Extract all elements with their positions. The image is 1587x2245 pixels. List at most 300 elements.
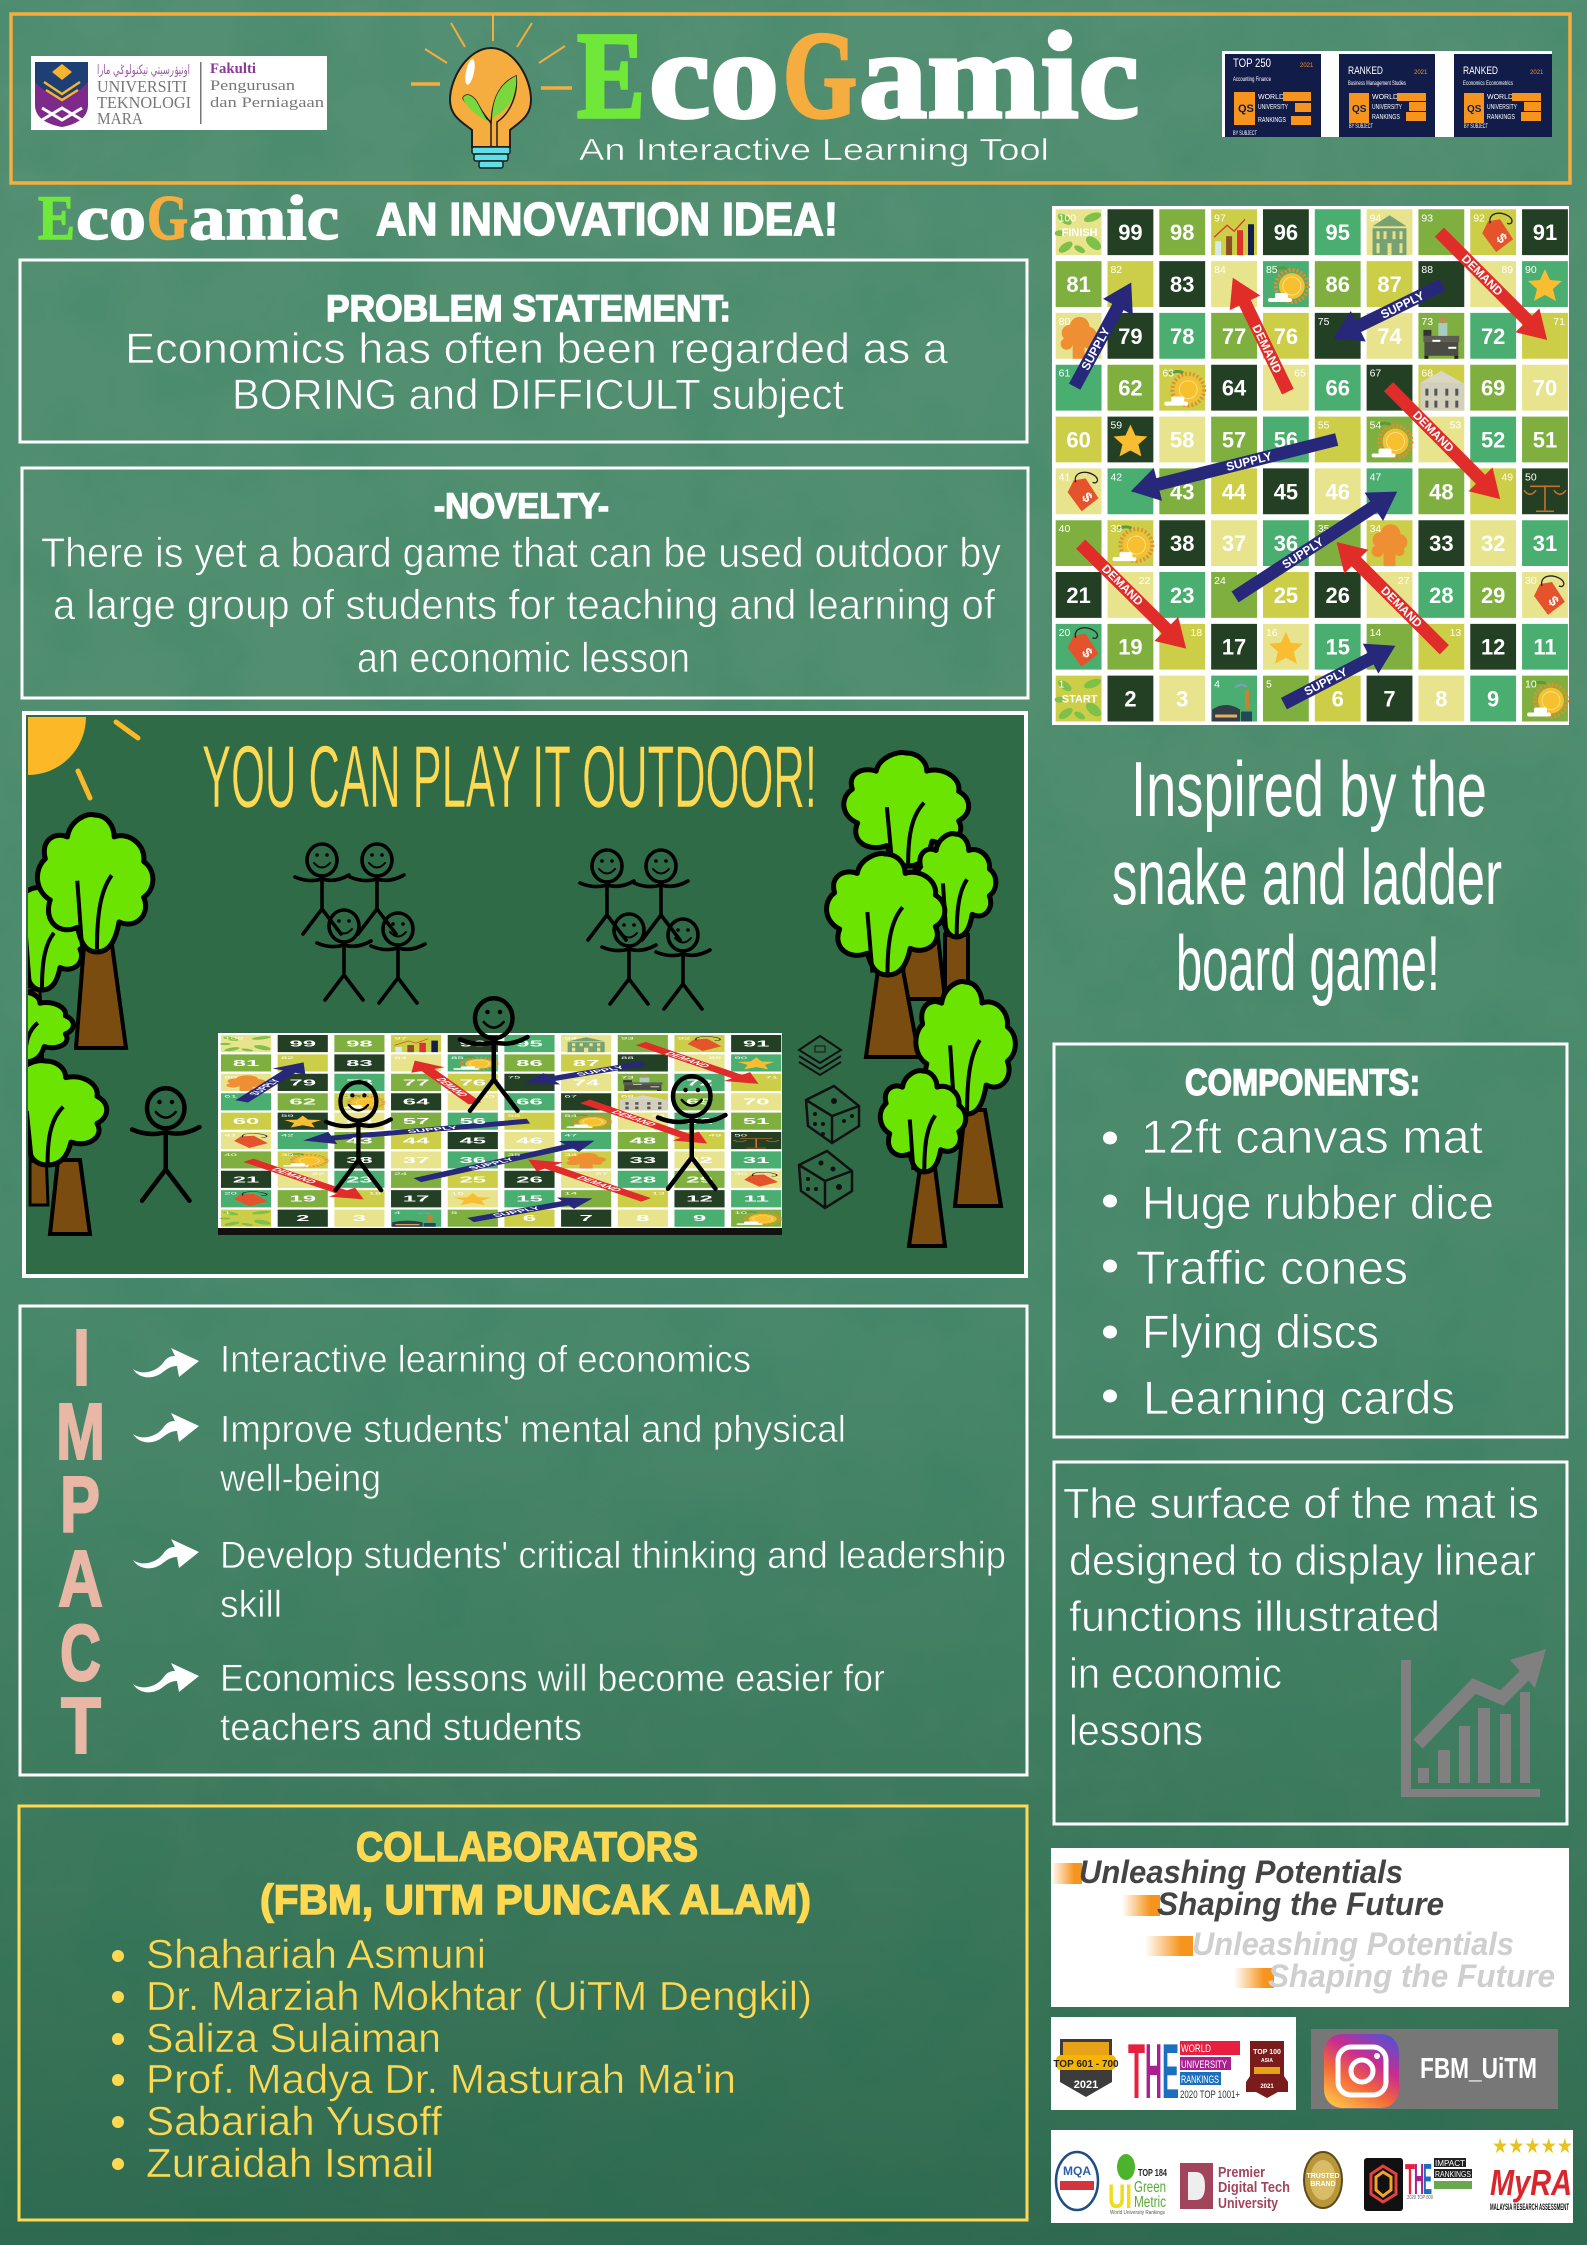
game mat: 28 xyxy=(630,1175,656,1184)
logo: UiTM faculty: TEKNOLOGI xyxy=(97,93,191,112)
game mat: 84 xyxy=(394,1055,407,1060)
slogan text xyxy=(1079,1854,1555,1994)
supply and demand arrows: DEMAND xyxy=(1378,583,1425,631)
slogan text: Unleashing Potentials xyxy=(1192,1926,1514,1962)
game mat: 6 xyxy=(523,1214,536,1223)
game mat: 41 xyxy=(224,1133,237,1137)
board numbers: small left: 24 xyxy=(1214,576,1226,587)
icon: die one xyxy=(806,1086,859,1143)
game mat: 82 xyxy=(281,1055,294,1060)
slogan panel xyxy=(1051,1848,1569,2007)
UI GreenMetric logo: UI xyxy=(1108,2178,1132,2216)
title: EcoGamic: E xyxy=(577,7,645,144)
board numbers: large: 28 xyxy=(1429,583,1454,608)
supply and demand arrows xyxy=(1060,220,1559,719)
trees: right group xyxy=(827,753,1015,1246)
impact item: easier lessons: teachers and students xyxy=(220,1707,582,1749)
panel: game board xyxy=(1052,206,1569,725)
vertical word IMPACT: T xyxy=(61,1681,101,1770)
game mat: SUPPLY xyxy=(466,1157,518,1171)
game mat: 91 xyxy=(743,1039,770,1048)
badge: accounting and finance: UNIVERSITY xyxy=(1258,104,1288,111)
board numbers: large: 21 xyxy=(1066,583,1091,608)
board numbers: large: 64 xyxy=(1222,376,1247,401)
icon: instagram xyxy=(1324,2034,1399,2108)
components list: Traffic cones xyxy=(1136,1241,1408,1294)
board numbers: small left: 59 xyxy=(1111,421,1122,432)
finish and start labels: START xyxy=(1062,694,1098,706)
game mat: 95 xyxy=(516,1039,543,1048)
board numbers: large: 46 xyxy=(1326,479,1350,504)
board numbers: large: 31 xyxy=(1533,531,1557,556)
board numbers: large: 12 xyxy=(1481,635,1505,660)
small EcoGamic wordmark: co xyxy=(76,182,146,253)
board numbers: small left: 100 xyxy=(1059,213,1076,224)
board numbers: large: 98 xyxy=(1170,220,1194,245)
supply and demand arrows: DEMAND xyxy=(1459,252,1506,299)
game mat: 58 xyxy=(346,1117,373,1126)
board numbers: small left: 63 xyxy=(1162,369,1174,380)
board numbers: large: 99 xyxy=(1118,220,1143,245)
game mat: 4 xyxy=(394,1210,401,1215)
game mat: 60 xyxy=(233,1117,259,1126)
board numbers: large: 77 xyxy=(1222,324,1246,349)
badge: economics and econometrics: QS xyxy=(1467,104,1482,115)
panel: impact xyxy=(20,1306,1027,1775)
game mat: 7 xyxy=(579,1214,593,1223)
logo: UiTM faculty: MARA xyxy=(97,109,143,128)
price tag dollar signs xyxy=(1079,230,1563,661)
board numbers: large: 11 xyxy=(1533,635,1557,660)
board numbers: large: 91 xyxy=(1533,220,1557,245)
instagram handle xyxy=(1311,2029,1558,2109)
problem text: BORING and DIFFICULT subject xyxy=(232,371,844,419)
game mat: 42 xyxy=(281,1133,294,1137)
game mat: 39 xyxy=(281,1152,294,1157)
board numbers: small left: 30 xyxy=(1525,576,1537,587)
small EcoGamic wordmark: amic xyxy=(189,182,339,253)
accreditation logos panel xyxy=(1051,2130,1573,2223)
description text: lessons xyxy=(1069,1707,1203,1755)
badge: economics and econometrics: WORLD xyxy=(1487,94,1513,101)
description text: designed to display linear xyxy=(1069,1537,1536,1585)
impact item: easier lessons xyxy=(133,1658,885,1749)
components heading: COMPONENTS: xyxy=(1185,1062,1420,1103)
badge: economics and econometrics: UNIVERSITY xyxy=(1487,104,1517,111)
board numbers: small left: 40 xyxy=(1059,524,1071,535)
MyRA five stars: ★★★★★ xyxy=(1492,2134,1573,2158)
game mat: 45 xyxy=(459,1136,486,1145)
title: EcoGamic: amic xyxy=(859,7,1139,144)
MQA seal: MQA xyxy=(1063,2164,1091,2178)
board numbers: small left: 88 xyxy=(1421,265,1433,276)
badge: accounting and finance: RANKINGS xyxy=(1258,117,1286,124)
badge: business and management: WORLD xyxy=(1372,94,1398,101)
board numbers: large: 15 xyxy=(1326,635,1350,660)
price tag dollar signs: $ xyxy=(1079,644,1096,661)
badge: accounting and finance: TOP 250 xyxy=(1233,56,1271,70)
impact item: critical thinking: skill xyxy=(220,1584,282,1626)
game mat: 24 xyxy=(394,1172,407,1176)
board numbers: large: 45 xyxy=(1274,479,1298,504)
game mat: 99 xyxy=(289,1039,316,1048)
board numbers: small right: 18 xyxy=(1191,628,1202,639)
UI GreenMetric logo: TOP 184 xyxy=(1138,2168,1167,2179)
header banner xyxy=(11,7,1570,183)
board numbers: small left: 84 xyxy=(1214,265,1226,276)
THE ranking logo: H xyxy=(1145,2027,1162,2115)
board numbers: small left: 20 xyxy=(1059,628,1071,639)
supply and demand arrows: DEMAND xyxy=(1410,408,1457,455)
game mat: 79 xyxy=(289,1078,316,1087)
board numbers: small right: 13 xyxy=(1450,628,1461,639)
game mat: 69 xyxy=(686,1097,713,1107)
panel: mat surface description xyxy=(1054,1462,1567,1824)
game mat: 78 xyxy=(346,1078,373,1087)
game mat: 18 xyxy=(368,1191,382,1196)
game mat: SUPPLY xyxy=(406,1125,460,1134)
board numbers: small right xyxy=(1139,265,1565,639)
game mat: 83 xyxy=(346,1059,373,1068)
small EcoGamic wordmark: G xyxy=(147,182,188,253)
maroon asia badge: ASIA xyxy=(1261,2058,1273,2064)
badge: business and management: BY SUBJECT xyxy=(1349,124,1373,130)
collaborators list: Shahariah Asmuni xyxy=(146,1931,486,1977)
price tag dollar signs: $ xyxy=(1493,230,1511,246)
collaborators list: Dr. Marziah Mokhtar (UiTM Dengkil) xyxy=(146,1973,812,2019)
board numbers: large: 9 xyxy=(1487,687,1499,712)
THE ranking logo: UNIVERSITY xyxy=(1181,2059,1227,2071)
game mat: 98 xyxy=(346,1039,373,1048)
game mat: 72 xyxy=(686,1078,713,1087)
logo: UiTM faculty xyxy=(31,56,327,130)
QS badge xyxy=(1053,2039,1119,2097)
inspired-by heading xyxy=(1112,745,1502,1007)
board numbers: small left: 68 xyxy=(1421,369,1433,380)
game mat: SUPPLY xyxy=(575,1065,628,1077)
game mat: 63 xyxy=(338,1094,351,1099)
game mat: 44 xyxy=(403,1136,429,1145)
THE ranking logo: RANKINGS xyxy=(1181,2074,1219,2086)
game mat: 17 xyxy=(403,1194,429,1204)
badge: accounting and finance xyxy=(1225,54,1321,137)
QS ranking badges xyxy=(1222,51,1552,137)
board numbers: large: 69 xyxy=(1481,376,1505,401)
badge: business and management: UNIVERSITY xyxy=(1372,104,1402,111)
panel: outdoor play illustration xyxy=(0,659,1026,1276)
board numbers: large: 60 xyxy=(1066,427,1091,452)
board numbers: small left: 93 xyxy=(1421,213,1433,224)
premier digital tech logo: Premier xyxy=(1218,2164,1265,2181)
game mat: 46 xyxy=(516,1136,543,1145)
game mat: DEMAND xyxy=(573,1175,624,1193)
game mat: 36 xyxy=(459,1156,486,1165)
game mat: 3 xyxy=(353,1214,366,1223)
game mat: DEMAND xyxy=(268,1167,319,1185)
badge: business and management: QS xyxy=(1352,104,1367,115)
board numbers: large: 6 xyxy=(1332,687,1344,712)
board numbers: large: 76 xyxy=(1274,324,1298,349)
collaborators list: Sabariah Yusoff xyxy=(146,2098,443,2144)
QS badge: TOP 601 - 700 xyxy=(1053,2059,1119,2070)
board numbers: large: 23 xyxy=(1170,583,1194,608)
collaborators heading: (FBM, UITM PUNCAK ALAM) xyxy=(260,1876,811,1923)
innovation tagline: AN INNOVATION IDEA! xyxy=(376,193,838,245)
supply and demand arrows: SUPPLY xyxy=(1279,534,1326,572)
game mat: 19 xyxy=(289,1194,316,1204)
components list: 12ft canvas mat xyxy=(1141,1110,1483,1163)
impact item: easier lessons: Economics lessons will become easier for xyxy=(220,1658,885,1700)
game mat: 92 xyxy=(678,1036,691,1040)
UI GreenMetric logo: World University Rankings xyxy=(1110,2210,1165,2216)
game mat: 57 xyxy=(403,1117,429,1126)
logo: UiTM faculty: اونيۏرسيتي تيكنولوݢي مارا xyxy=(97,63,190,78)
logo: UiTM faculty: UNIVERSITI xyxy=(97,77,187,96)
board numbers: large: 29 xyxy=(1481,583,1505,608)
MQA seal xyxy=(1056,2152,1098,2210)
board numbers: large: 25 xyxy=(1274,583,1298,608)
description text xyxy=(1063,1480,1539,1755)
novelty text: an economic lesson xyxy=(357,634,690,681)
components list: Learning cards xyxy=(1143,1371,1455,1424)
board numbers: large: 96 xyxy=(1274,220,1298,245)
board numbers: large: 87 xyxy=(1377,272,1402,297)
board numbers: large: 17 xyxy=(1222,635,1246,660)
vertical word IMPACT: A xyxy=(58,1534,103,1623)
board numbers: small left: 47 xyxy=(1370,472,1381,483)
board numbers: small left: 67 xyxy=(1370,369,1381,380)
board numbers: large: 48 xyxy=(1429,479,1454,504)
novelty text: a large group of students for teaching and learning of xyxy=(53,581,995,628)
title: EcoGamic xyxy=(577,7,1139,144)
UI GreenMetric logo: Green xyxy=(1134,2179,1166,2196)
board numbers: large: 58 xyxy=(1170,427,1194,452)
game mat: 97 xyxy=(394,1036,407,1040)
game mat: 35 xyxy=(508,1152,521,1157)
badge: economics and econometrics xyxy=(1454,54,1552,137)
board numbers: large: 33 xyxy=(1429,531,1454,556)
badge: economics and econometrics: BY SUBJECT xyxy=(1464,124,1488,130)
UI GreenMetric logo: Metric xyxy=(1134,2194,1166,2211)
board numbers: large: 38 xyxy=(1170,531,1194,556)
board numbers: small left: 34 xyxy=(1370,524,1381,535)
price tag dollar signs: $ xyxy=(1079,489,1096,505)
MyRA five stars xyxy=(1490,2134,1573,2212)
game mat: 94 xyxy=(564,1036,577,1040)
supply and demand arrows: SUPPLY xyxy=(1302,665,1350,699)
badge: business and management: Business Management Studies xyxy=(1348,81,1406,87)
board numbers: large: 86 xyxy=(1326,272,1350,297)
board numbers: large: 32 xyxy=(1481,531,1505,556)
game mat: DEMAND xyxy=(432,1077,470,1097)
game mat: 2 xyxy=(296,1214,309,1223)
game mat: 11 xyxy=(744,1194,769,1204)
panel: collaborators xyxy=(19,1806,1027,2220)
board numbers: large: 3 xyxy=(1176,687,1188,712)
impact item: critical thinking xyxy=(133,1535,1006,1626)
game mat: 23 xyxy=(346,1175,373,1184)
novelty text: There is yet a board game that can be used outdoor by xyxy=(41,529,1001,576)
game mat: 71 xyxy=(765,1075,778,1079)
board numbers: large: 57 xyxy=(1222,427,1246,452)
vertical word IMPACT: M xyxy=(56,1387,105,1476)
collaborators list: Prof. Madya Dr. Masturah Ma'in xyxy=(146,2056,736,2102)
description text: functions illustrated xyxy=(1069,1593,1440,1641)
small EcoGamic wordmark: E xyxy=(38,182,75,253)
board numbers: small left: 92 xyxy=(1473,213,1485,224)
collaborators list: Saliza Sulaiman xyxy=(146,2015,441,2061)
icon: die two xyxy=(799,1151,852,1208)
game mat: 54 xyxy=(564,1113,577,1118)
game mat: 31 xyxy=(743,1156,770,1165)
vertical word IMPACT xyxy=(56,1313,105,1770)
game mat: 90 xyxy=(734,1055,747,1060)
game mat: 66 xyxy=(516,1097,543,1107)
game mat: 33 xyxy=(630,1156,656,1165)
board numbers: small left: 73 xyxy=(1421,317,1433,328)
THE impact ranking logo xyxy=(1364,2155,1472,2211)
board numbers: large: 2 xyxy=(1124,687,1137,712)
THE ranking logo: E xyxy=(1162,2027,1179,2115)
game mat: 62 xyxy=(289,1097,316,1107)
board numbers: large: 66 xyxy=(1326,376,1350,401)
collaborators heading xyxy=(260,1823,811,1923)
game mat: 29 xyxy=(686,1175,713,1184)
board numbers: large: 44 xyxy=(1222,479,1247,504)
board numbers: small left: 97 xyxy=(1214,213,1226,224)
game mat xyxy=(218,1033,782,1235)
game mat: 37 xyxy=(403,1156,429,1165)
game mat: 50 xyxy=(734,1133,747,1137)
problem text xyxy=(125,325,948,419)
board numbers: small right: 71 xyxy=(1553,317,1565,328)
game mat: 40 xyxy=(224,1152,237,1157)
board numbers: large xyxy=(1066,220,1557,712)
board numbers: small right: 89 xyxy=(1501,265,1513,276)
board numbers: small left: 85 xyxy=(1266,265,1278,276)
badge: economics and econometrics: 2021 xyxy=(1530,70,1544,76)
board numbers: small right: 22 xyxy=(1139,576,1151,587)
game mat: 87 xyxy=(573,1059,600,1068)
supply and demand arrows: SUPPLY xyxy=(1225,449,1273,474)
board numbers: small left: 1 xyxy=(1059,680,1065,691)
stick figures: right group xyxy=(580,850,710,1009)
novelty text xyxy=(41,529,1001,681)
trees: left group xyxy=(28,812,156,1236)
board numbers: large: 52 xyxy=(1481,427,1505,452)
board numbers: large: 79 xyxy=(1118,324,1143,349)
game mat: 34 xyxy=(564,1152,577,1157)
game mat: 27 xyxy=(595,1172,608,1176)
game mat: 55 xyxy=(508,1113,521,1118)
badge: accounting and finance: BY SUBJECT xyxy=(1233,131,1257,137)
game mat: 25 xyxy=(459,1175,486,1184)
game mat: 16 xyxy=(451,1191,464,1196)
game mat: 74 xyxy=(573,1078,600,1087)
board numbers: large: 37 xyxy=(1222,531,1246,556)
game mat: 22 xyxy=(312,1172,325,1176)
game mat: 52 xyxy=(686,1117,713,1126)
panel: outdoor play illustration: YOU CAN PLAY IT OUTDOOR! xyxy=(202,727,817,826)
game mat: SUPPLY xyxy=(247,1078,284,1096)
description text: The surface of the mat is xyxy=(1063,1480,1539,1528)
board numbers: large: 78 xyxy=(1170,324,1194,349)
vertical word IMPACT: I xyxy=(73,1313,90,1402)
THE impact ranking logo: 2020 TOP 600 xyxy=(1407,2195,1433,2201)
badge: business and management: RANKED xyxy=(1348,65,1383,77)
collaborators heading: COLLABORATORS xyxy=(356,1823,698,1870)
board numbers: small right: 53 xyxy=(1450,421,1461,432)
board numbers: small right: 49 xyxy=(1501,472,1513,483)
game mat: 73 xyxy=(621,1075,634,1079)
game mat: 65 xyxy=(482,1094,495,1099)
board numbers: small left: 50 xyxy=(1525,472,1537,483)
board numbers: small right: 65 xyxy=(1294,369,1306,380)
game mat: 43 xyxy=(346,1136,373,1145)
game mat: DEMAND xyxy=(661,1051,712,1069)
maroon asia badge: 2021 xyxy=(1260,2084,1274,2090)
icon: sun xyxy=(28,717,140,800)
board numbers: small left: 94 xyxy=(1370,213,1381,224)
board numbers: small left: 80 xyxy=(1059,317,1071,328)
orange speed bars xyxy=(1051,1863,1274,1988)
impact item: interactive learning: Interactive learning of economics xyxy=(220,1339,751,1381)
icon: learning cards xyxy=(799,1036,841,1075)
game mat: 59 xyxy=(281,1113,294,1118)
description text: in economic xyxy=(1069,1650,1282,1698)
board numbers: small left xyxy=(1059,213,1537,691)
board numbers: small left: 16 xyxy=(1266,628,1278,639)
icon: light bulb with leaves xyxy=(411,14,572,168)
game mat: 70 xyxy=(743,1097,770,1107)
badge: business and management: RANKINGS xyxy=(1372,114,1400,121)
THE ranking logo xyxy=(1128,2027,1240,2115)
UI GreenMetric logo xyxy=(1108,2154,1167,2216)
impact item: well-being: well-being xyxy=(219,1458,381,1500)
premier digital tech logo: Digital Tech xyxy=(1218,2179,1290,2196)
game mat: 5 xyxy=(451,1210,458,1215)
board numbers: small left: 10 xyxy=(1525,680,1537,691)
collaborators list xyxy=(112,1931,812,2186)
trusted brand seal: TRUSTED xyxy=(1306,2173,1340,2180)
QS badge: 2021 xyxy=(1074,2079,1098,2091)
slogan text: Shaping the Future xyxy=(1268,1958,1555,1994)
game mat: 80 xyxy=(224,1075,237,1079)
components list xyxy=(1103,1110,1494,1424)
board numbers: small left: 5 xyxy=(1266,680,1272,691)
THE impact ranking logo: IMPACT xyxy=(1435,2159,1465,2168)
game mat: 56 xyxy=(459,1117,486,1126)
badge: accounting and finance: Accounting Finance xyxy=(1233,77,1271,83)
THE ranking logo: T xyxy=(1128,2027,1145,2115)
game mat: 64 xyxy=(403,1097,429,1107)
logo: UiTM faculty: dan Perniagaan xyxy=(210,95,325,111)
game mat: 86 xyxy=(516,1059,543,1068)
board numbers: large: 19 xyxy=(1118,635,1143,660)
THE impact ranking logo: T xyxy=(1405,2155,1415,2204)
small EcoGamic wordmark xyxy=(38,182,339,253)
board numbers: large: 26 xyxy=(1326,583,1350,608)
game mat: 93 xyxy=(621,1036,634,1040)
game mat: SUPPLY xyxy=(491,1206,543,1218)
board numbers: large: 72 xyxy=(1481,324,1505,349)
board numbers: small left: 14 xyxy=(1370,628,1381,639)
badge: economics and econometrics: RANKINGS xyxy=(1487,114,1515,121)
game mat: 76 xyxy=(459,1078,486,1087)
board numbers: large: 74 xyxy=(1377,324,1403,349)
game mat: 81 xyxy=(233,1059,259,1068)
badge: accounting and finance: 2021 xyxy=(1300,63,1314,69)
